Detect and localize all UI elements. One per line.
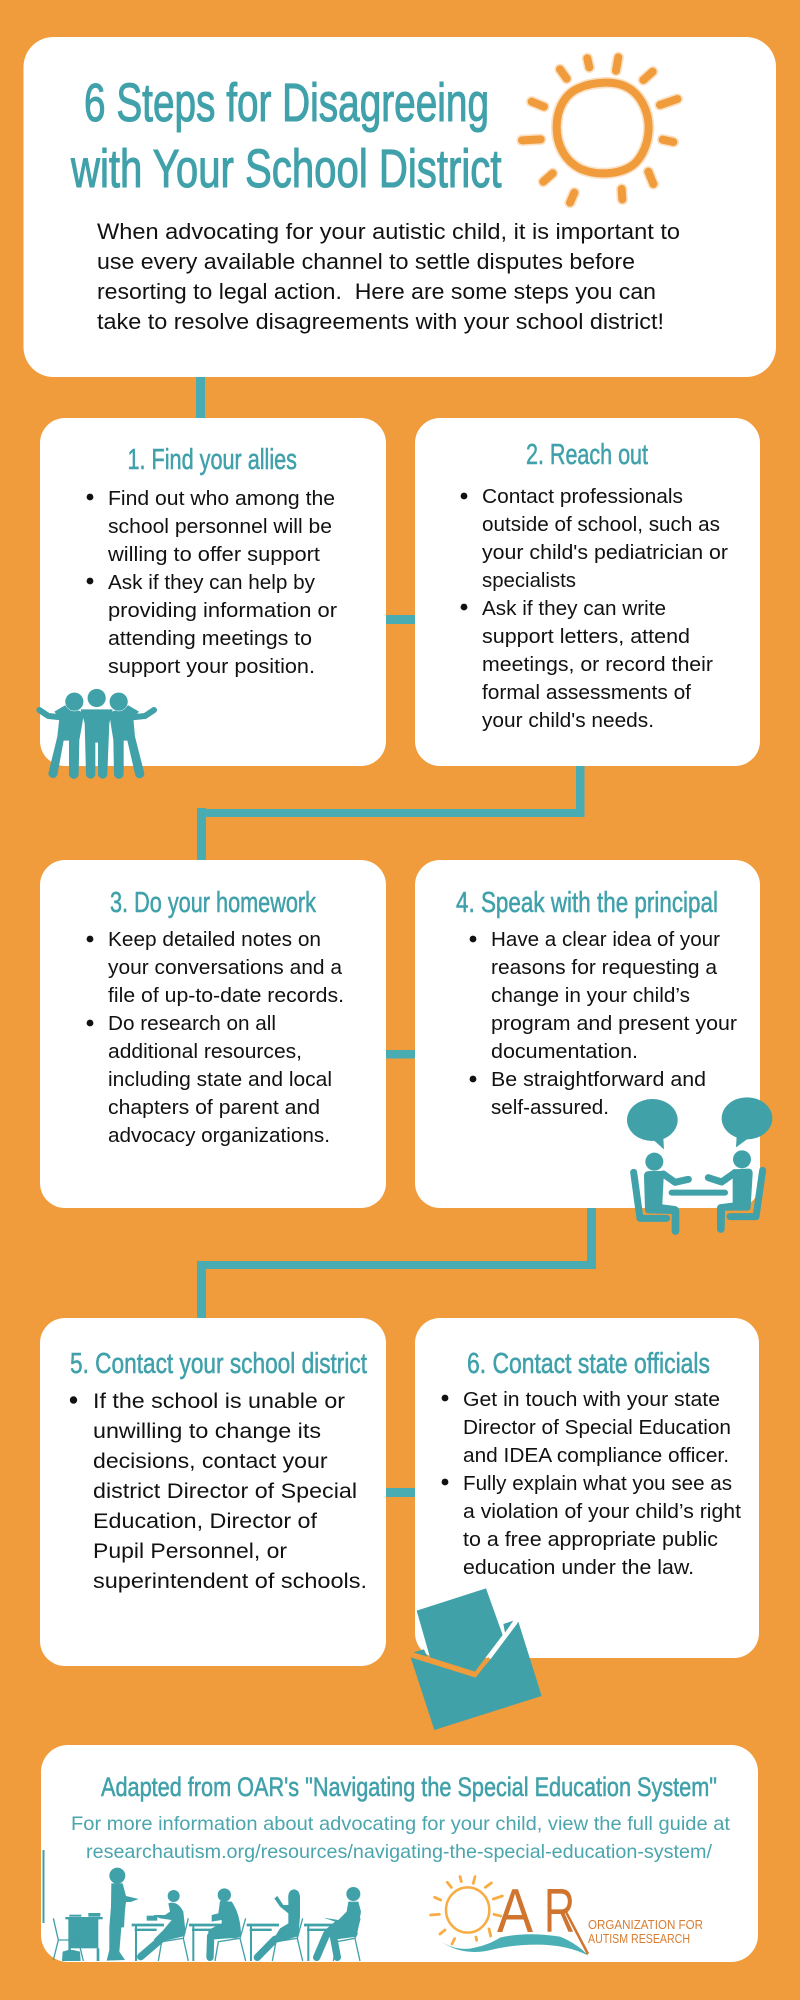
logo letters AR [497, 1877, 588, 1954]
step 3 bullet list: including state and local [108, 1069, 332, 1091]
step 1 bullet list: providing information or [108, 600, 337, 622]
step 1 card [40, 418, 386, 766]
step 4 bullet list: Have a clear idea of your [491, 929, 720, 951]
step 2 bullet list: outside of school, such as [482, 514, 720, 536]
step 6 bullet list [442, 1389, 741, 1579]
step 4 bullet list: self-assured. [491, 1097, 609, 1119]
step 4 bullet list: program and present your [491, 1013, 737, 1035]
step 2 card [415, 418, 760, 766]
intro panel background [24, 37, 776, 377]
step 5 card [40, 1318, 386, 1666]
step 6 bullet list: education under the law. [463, 1557, 694, 1579]
logo sun [431, 1877, 502, 1944]
step 6 bullet list: Get in touch with your state [463, 1389, 720, 1411]
footer text with link [71, 1813, 731, 1863]
step 5 bullet list: Pupil Personnel, or [93, 1539, 287, 1563]
intro text: take to resolve disagreements with your school district! [97, 309, 664, 334]
icon: envelope with letter [411, 1588, 542, 1730]
step 4 bullet list: documentation. [491, 1041, 638, 1063]
step 6 heading: 6. Contact state officials [467, 1348, 710, 1380]
step 1 bullet list: support your position. [108, 656, 315, 678]
step 2 bullet list: meetings, or record their [482, 654, 713, 676]
title: with Your School District [70, 139, 501, 199]
panel: step 6 contact state officials [415, 1318, 759, 1658]
intro text [97, 219, 680, 334]
logo wordmark: ORGANIZATION FOR [588, 1918, 703, 1932]
panel: step 4 speak with the principal [415, 860, 760, 1208]
logo wordmark [588, 1918, 703, 1946]
step 5 bullet list [70, 1389, 367, 1593]
step 1 bullet list: Find out who among the [108, 488, 335, 510]
step 1 bullet list: school personnel will be [108, 516, 332, 538]
step 4 bullet list: change in your child’s [491, 985, 690, 1007]
step 1 heading: 1. Find your allies [128, 444, 297, 476]
step 5 bullet list: If the school is unable or [93, 1389, 345, 1413]
step 6 card [415, 1318, 759, 1658]
step 2 bullet list: specialists [482, 570, 576, 592]
icon: classroom silhouette [53, 1868, 361, 1961]
step 3 bullet list [87, 929, 344, 1147]
icon: two people talking at a table [627, 1097, 772, 1235]
step 1 bullet list: Ask if they can help by [108, 572, 315, 594]
step 5 bullet list: Education, Director of [93, 1509, 317, 1533]
step 4 bullet list: reasons for requesting a [491, 957, 718, 979]
step 2 bullet list: Ask if they can write [482, 598, 666, 620]
panel: step 2 reach out [415, 418, 760, 766]
step 6 bullet list: a violation of your child’s right [463, 1501, 741, 1523]
step 3 bullet list: file of up-to-date records. [108, 985, 344, 1007]
title: 6 Steps for Disagreeing [84, 73, 489, 133]
icon: sun [522, 57, 677, 203]
step 2 bullet list: your child's needs. [482, 710, 654, 732]
step 3 card [40, 860, 386, 1208]
footer text with link: For more information about advocating for your child, view the full guide at [71, 1813, 731, 1835]
step 3 bullet list: Do research on all [108, 1013, 276, 1035]
panel: source and more information [41, 1745, 758, 1962]
step 2 bullet list: your child's pediatrician or [482, 542, 728, 564]
step 6 bullet list: and IDEA compliance officer. [463, 1445, 729, 1467]
logo wave [440, 1934, 588, 1956]
title [70, 73, 501, 199]
step 1 bullet list [87, 488, 337, 678]
step 6 bullet list: to a free appropriate public [463, 1529, 718, 1551]
step 5 heading: 5. Contact your school district [70, 1348, 367, 1380]
panel: introduction [24, 37, 776, 377]
step 3 bullet list: your conversations and a [108, 957, 343, 979]
step 2 bullet list: Contact professionals [482, 486, 683, 508]
intro text: resorting to legal action. Here are some steps you can [97, 279, 656, 304]
step 2 bullet list [461, 486, 728, 732]
panel: step 3 do your homework [40, 860, 386, 1208]
step 5 bullet list: decisions, contact your [93, 1449, 328, 1473]
step 1 bullet list: attending meetings to [108, 628, 312, 650]
step 3 bullet list: Keep detailed notes on [108, 929, 321, 951]
step 3 bullet list: additional resources, [108, 1041, 302, 1063]
panel: step 1 find your allies [40, 418, 386, 766]
logo: Organization for Autism Research [431, 1877, 703, 1956]
intro text: use every available channel to settle disputes before [97, 249, 635, 274]
step 4 bullet list [470, 929, 737, 1119]
footer panel background [41, 1745, 758, 1962]
step 3 bullet list: advocacy organizations. [108, 1125, 330, 1147]
step 6 bullet list: Director of Special Education [463, 1417, 731, 1439]
step 5 bullet list: district Director of Special [93, 1479, 357, 1503]
intro text: When advocating for your autistic child, it is important to [97, 219, 680, 244]
step 4 bullet list: Be straightforward and [491, 1069, 706, 1091]
footer text with link: researchautism.org/resources/navigating-the-special-education-system/ [86, 1841, 713, 1863]
step 5 bullet list: unwilling to change its [93, 1419, 321, 1443]
step 3 heading: 3. Do your homework [110, 887, 316, 919]
icon: three people embracing [39, 689, 154, 779]
step 3 bullet list: chapters of parent and [108, 1097, 320, 1119]
step 2 heading: 2. Reach out [526, 439, 648, 471]
logo letters AR: A [497, 1877, 534, 1946]
panel: step 5 contact your school district [40, 1318, 386, 1666]
step 6 bullet list: Fully explain what you see as [463, 1473, 732, 1495]
step 5 bullet list: superintendent of schools. [93, 1569, 367, 1593]
step 4 card [415, 860, 760, 1208]
step 1 bullet list: willing to offer support [107, 544, 320, 566]
logo letters AR: R [544, 1877, 575, 1946]
step 2 bullet list: formal assessments of [482, 682, 691, 704]
logo wordmark: AUTISM RESEARCH [588, 1932, 690, 1946]
step 2 bullet list: support letters, attend [482, 626, 690, 648]
step 4 heading: 4. Speak with the principal [456, 887, 718, 919]
